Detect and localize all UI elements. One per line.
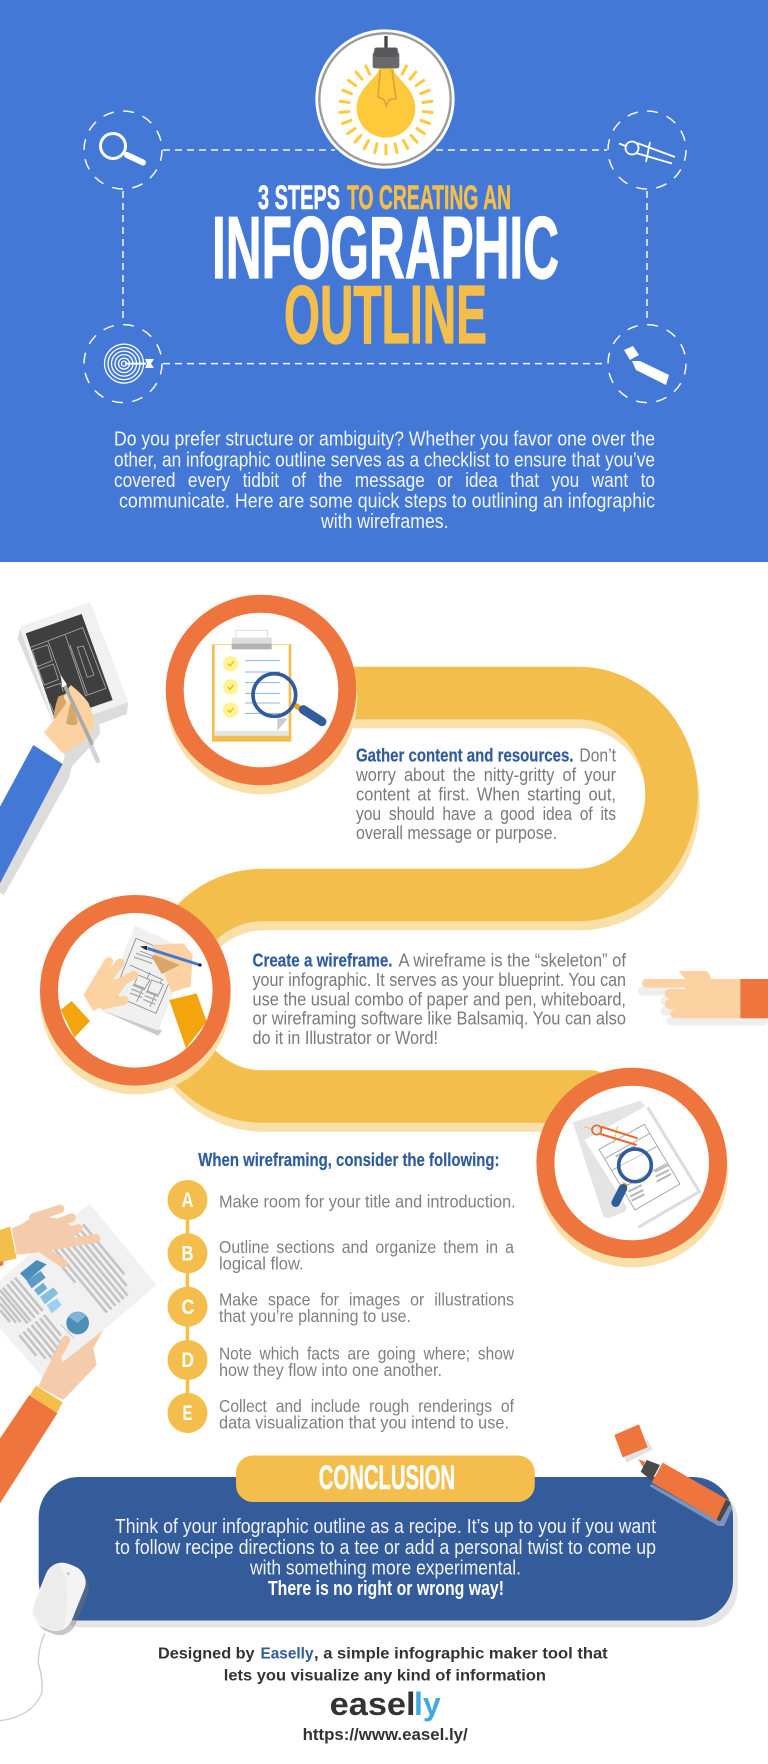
icon: marker: [624, 346, 669, 385]
icon: hands on paper wireframe: [61, 926, 207, 1048]
badge E: [168, 1393, 208, 1433]
step 2 text: your infographic. It serves as your blueprint. You can: [252, 970, 626, 990]
step 2 text: [252, 950, 627, 1048]
icon: magnifier: [100, 134, 143, 162]
badge A: A: [182, 1189, 194, 1212]
checklist items: how they flow into one another.: [219, 1360, 442, 1380]
dashed frame: [84, 111, 686, 403]
checklist items: that you’re planning to use.: [219, 1306, 411, 1326]
title: OUTLINE: [284, 268, 487, 361]
step 3 medallion: [537, 1077, 728, 1267]
intro text: other, an infographic outline serves as a checklist to ensure that you’ve: [114, 448, 655, 472]
logo: easelly: ly: [414, 1686, 441, 1722]
checklist items: Collect and include rough renderings of: [219, 1396, 514, 1416]
step 2 medallion: [40, 904, 231, 1094]
title: TO CREATING AN: [347, 179, 511, 217]
panel: header: [0, 0, 768, 562]
step 2 text: or wireframing software like Balsamiq. You can also: [252, 1008, 626, 1028]
icon: compass: [619, 142, 675, 164]
intro text: with wireframes.: [320, 510, 448, 533]
step 1 text: content at first. When starting out,: [356, 784, 616, 804]
illustration: mouse: [0, 1557, 94, 1721]
checklist items: Note which facts are going where; show: [219, 1343, 514, 1363]
credits: [158, 1646, 608, 1684]
step 2 text: A wireframe is the “skeleton” of: [398, 950, 627, 970]
badge D: [168, 1340, 208, 1380]
conclusion badge: [236, 1456, 535, 1502]
conclusion text: Think of your infographic outline as a recipe. It’s up to you if you want: [115, 1516, 656, 1538]
intro text: communicate. Here are some quick steps to outlining an infographic: [119, 490, 655, 513]
credits: lets you visualize any kind of information: [224, 1667, 546, 1684]
checklist timeline badges: [168, 1180, 208, 1433]
step 1 text: Gather content and resources.: [356, 746, 574, 766]
checklist items: [219, 1192, 516, 1432]
illustration: marker: [614, 1424, 733, 1526]
step 1 medallion: [167, 604, 357, 794]
icon: clipboard and magnifier: [212, 630, 322, 742]
conclusion text: with something more experimental.: [249, 1557, 521, 1579]
icon: target: [104, 344, 154, 383]
checklist items: data visualization that you intend to use.: [219, 1412, 509, 1432]
badge C: C: [182, 1296, 194, 1319]
badge B: B: [182, 1242, 194, 1266]
step 2 text: do it in Illustrator or Word!: [252, 1028, 438, 1048]
badge E: E: [182, 1402, 192, 1425]
icon: light bulb: [315, 29, 455, 169]
badge D: D: [182, 1349, 194, 1372]
conclusion badge: CONCLUSION: [319, 1459, 455, 1497]
credits: Easelly: [260, 1646, 314, 1662]
winding yellow path: [167, 693, 674, 1172]
step 1 text: overall message or purpose.: [356, 823, 557, 843]
title: 3 STEPS: [258, 179, 340, 217]
icon: wireframe with compass and magnifier: [573, 1101, 699, 1227]
illustration: pointing hand: [638, 971, 768, 1026]
illustration: hand holding tablet: [0, 605, 128, 895]
badge C: [168, 1287, 208, 1327]
panel: conclusion: [39, 1456, 738, 1627]
conclusion text: [115, 1516, 656, 1600]
checklist items: Make room for your title and introduction.: [219, 1192, 516, 1212]
step 2 text: Create a wireframe.: [252, 950, 392, 970]
intro text: Do you prefer structure or ambiguity? Whether you favor one over the: [114, 428, 655, 450]
website url: https://www.easel.ly/: [303, 1725, 468, 1744]
logo: easelly: easel: [330, 1686, 416, 1722]
badge B: [168, 1233, 208, 1273]
step 1 text: Don’t: [579, 746, 616, 766]
intro text: covered every tidbit of the message or idea that you want to: [114, 469, 655, 492]
credits: Designed by: [158, 1646, 255, 1662]
illustration: hands holding report: [0, 1203, 157, 1503]
checklist items: Make space for images or illustrations: [219, 1290, 514, 1310]
checklist items: logical flow.: [219, 1254, 304, 1274]
checklist items: Outline sections and organize them in a: [219, 1237, 514, 1257]
step 1 text: [355, 746, 616, 843]
wireframing checklist heading: When wireframing, consider the following:: [198, 1150, 500, 1170]
intro text: [114, 428, 655, 533]
step 1 text: worry about the nitty-gritty of your: [355, 765, 616, 785]
title: [212, 179, 559, 361]
badge A: [168, 1180, 208, 1220]
step 1 text: you should have a good idea of its: [356, 804, 616, 824]
conclusion text: to follow recipe directions to a tee or add a personal twist to come up: [115, 1537, 656, 1559]
conclusion text: There is no right or wrong way!: [268, 1578, 504, 1600]
step 2 text: use the usual combo of paper and pen, whiteboard,: [252, 989, 626, 1009]
credits: , a simple infographic maker tool that: [314, 1646, 608, 1662]
